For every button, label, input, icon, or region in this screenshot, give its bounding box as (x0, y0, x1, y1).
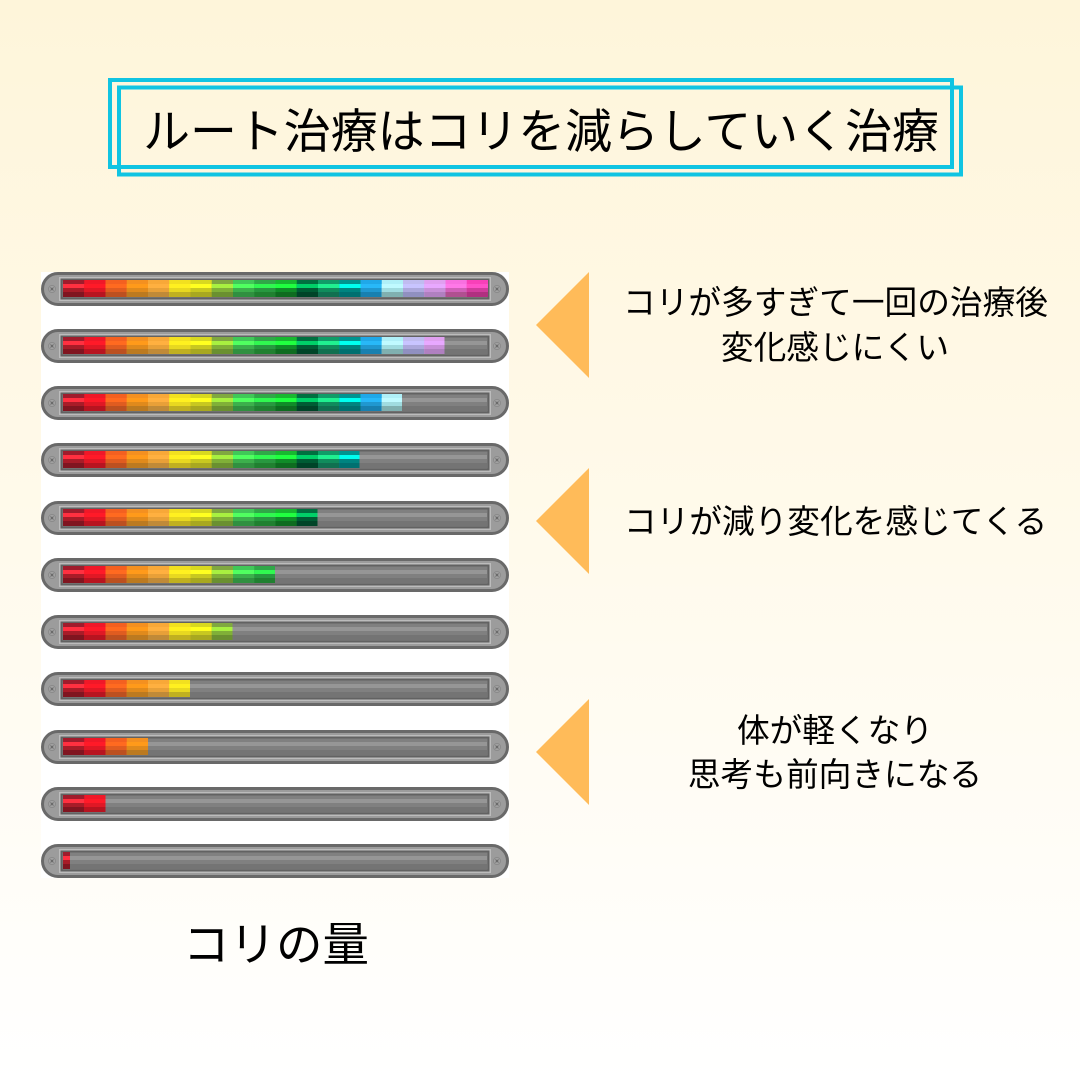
arrow 2 (536, 468, 589, 574)
bar 6 (42, 560, 508, 590)
bar 11 (42, 846, 508, 876)
bar chart: amount of stiffness (42, 274, 508, 876)
chart label: コリの量 (183, 919, 369, 971)
white panel behind bars (41, 272, 509, 878)
arrow 1 (536, 272, 589, 378)
bar 5 (42, 502, 508, 534)
title: ルート治療はコリを減らしていく治療 (143, 106, 939, 158)
callout 3: 体が軽くなり (737, 712, 933, 749)
bar 10 (42, 788, 508, 820)
arrow 3 (536, 699, 589, 805)
bar 3 (42, 388, 508, 418)
callout 1: 変化感じにくい (721, 329, 949, 366)
bar 8 (42, 674, 508, 704)
callout 2: コリが減り変化を感じてくる (624, 503, 1047, 540)
bar 7 (42, 616, 508, 648)
bar 1 (42, 274, 508, 304)
bar 9 (42, 732, 508, 762)
callout 1 (623, 284, 1048, 366)
bar 2 (42, 330, 508, 362)
callout 1: コリが多すぎて一回の治療後 (623, 284, 1048, 321)
bar 4 (42, 444, 508, 476)
title frame (110, 80, 961, 174)
callout 3: 思考も前向きになる (688, 756, 982, 793)
callout 3 (688, 712, 982, 793)
